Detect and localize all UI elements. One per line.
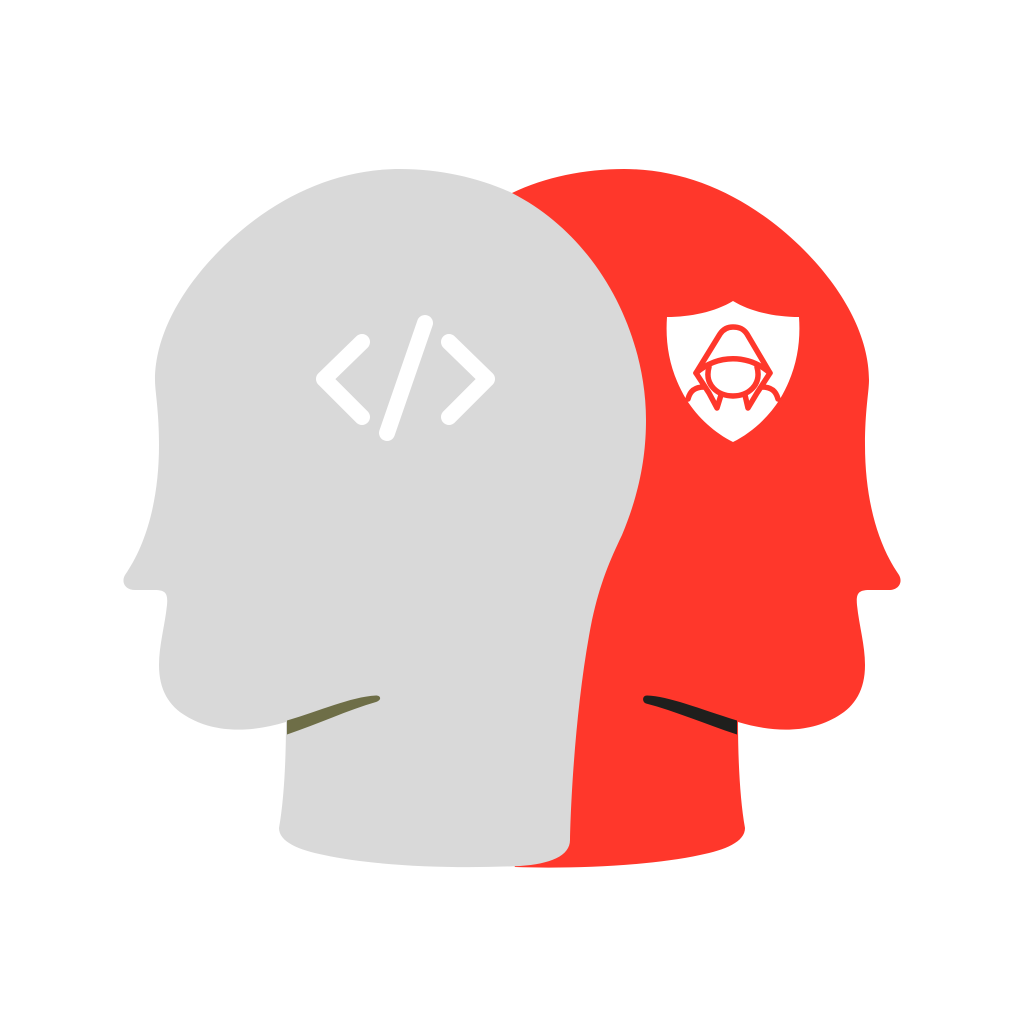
icon: shield with hooded hacker xyxy=(667,301,799,442)
red head facing right xyxy=(480,169,901,868)
neck shadow: dark jaw line xyxy=(643,696,737,734)
grey head facing left xyxy=(123,169,646,867)
shield xyxy=(667,301,799,442)
hooded figure xyxy=(688,327,778,408)
icon: code brackets xyxy=(324,323,487,433)
neck shadow: olive jaw line xyxy=(287,696,380,734)
